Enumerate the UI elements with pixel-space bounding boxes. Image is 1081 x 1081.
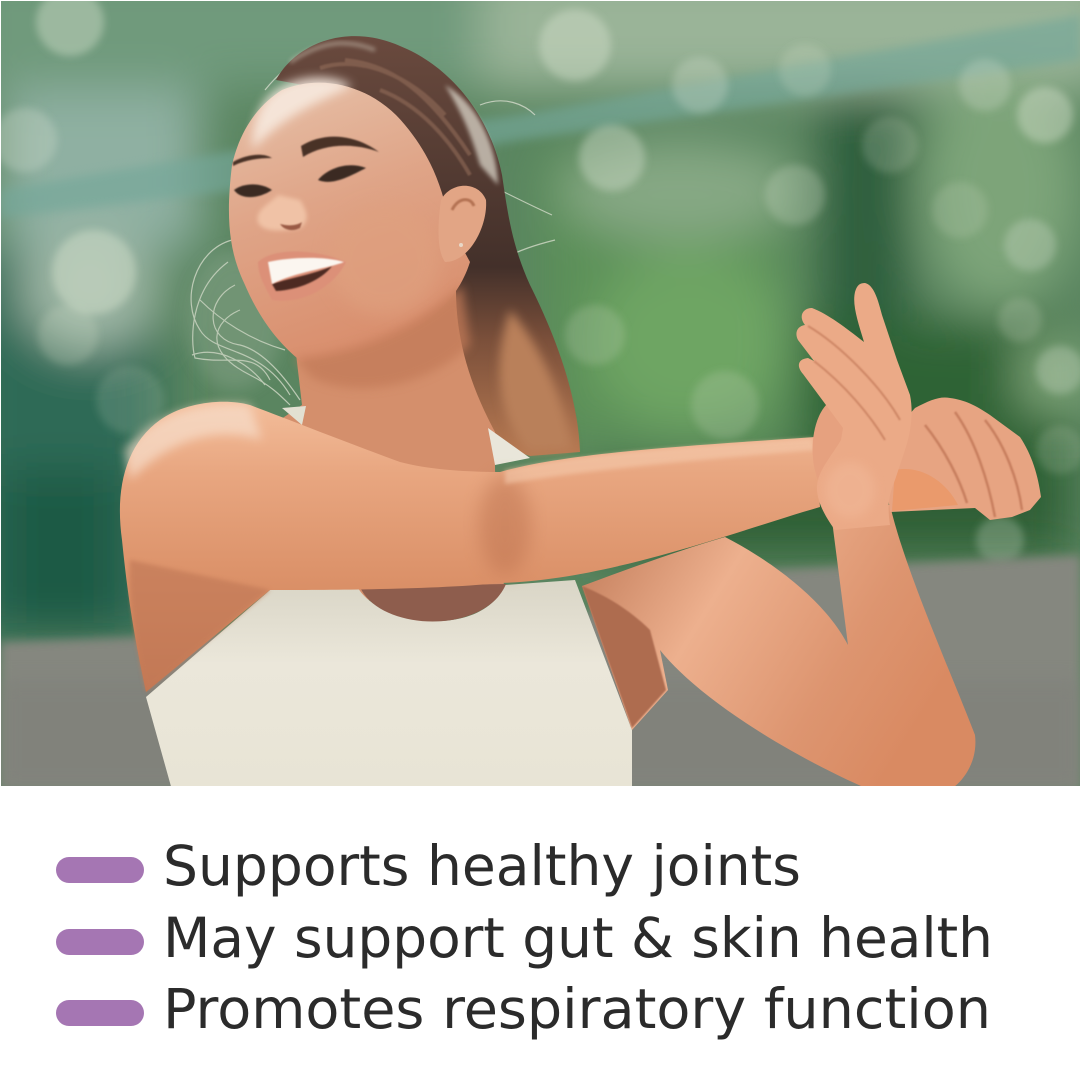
eyebrows: [301, 137, 379, 157]
neck and chest: [283, 291, 504, 600]
cheek glow: [370, 280, 421, 306]
chin and jaw shadow: [295, 285, 470, 388]
forehead highlight: [252, 77, 352, 150]
upper hand: [796, 283, 912, 530]
teal net band: [0, 15, 1081, 218]
ground: [0, 555, 1081, 790]
upper finger lines: [808, 326, 900, 440]
ear: [438, 186, 486, 262]
ponytail and hair: [276, 36, 580, 456]
hands: [796, 283, 1041, 530]
bokeh circles: [0, 0, 1081, 564]
benefit 3: Promotes respiratory function: [163, 977, 991, 1041]
mouth: [258, 251, 346, 301]
white top: [146, 406, 632, 790]
right upper arm and forearm: [582, 505, 975, 790]
benefit list: [56, 834, 993, 1041]
sunlit hair edge: [445, 85, 498, 185]
bullet pill: [56, 857, 144, 883]
face: [229, 77, 486, 388]
benefit 1: Supports healthy joints: [163, 834, 801, 898]
bullet pill: [56, 929, 144, 955]
photo background: blurred green park with bokeh: [0, 0, 1081, 790]
lower hand: [885, 397, 1041, 520]
eyes: [318, 165, 366, 182]
lower palm shadow: [892, 469, 958, 511]
lower finger lines: [925, 412, 1022, 517]
photo: woman stretching arm outdoors: [0, 0, 1081, 790]
bullet pill: [56, 1000, 144, 1026]
benefit 2: May support gut & skin health: [163, 906, 993, 970]
palm behind: [812, 405, 843, 480]
shoulder and outstretched arm: [120, 402, 820, 692]
nose: [258, 195, 307, 230]
flyaway hair: [187, 45, 555, 405]
